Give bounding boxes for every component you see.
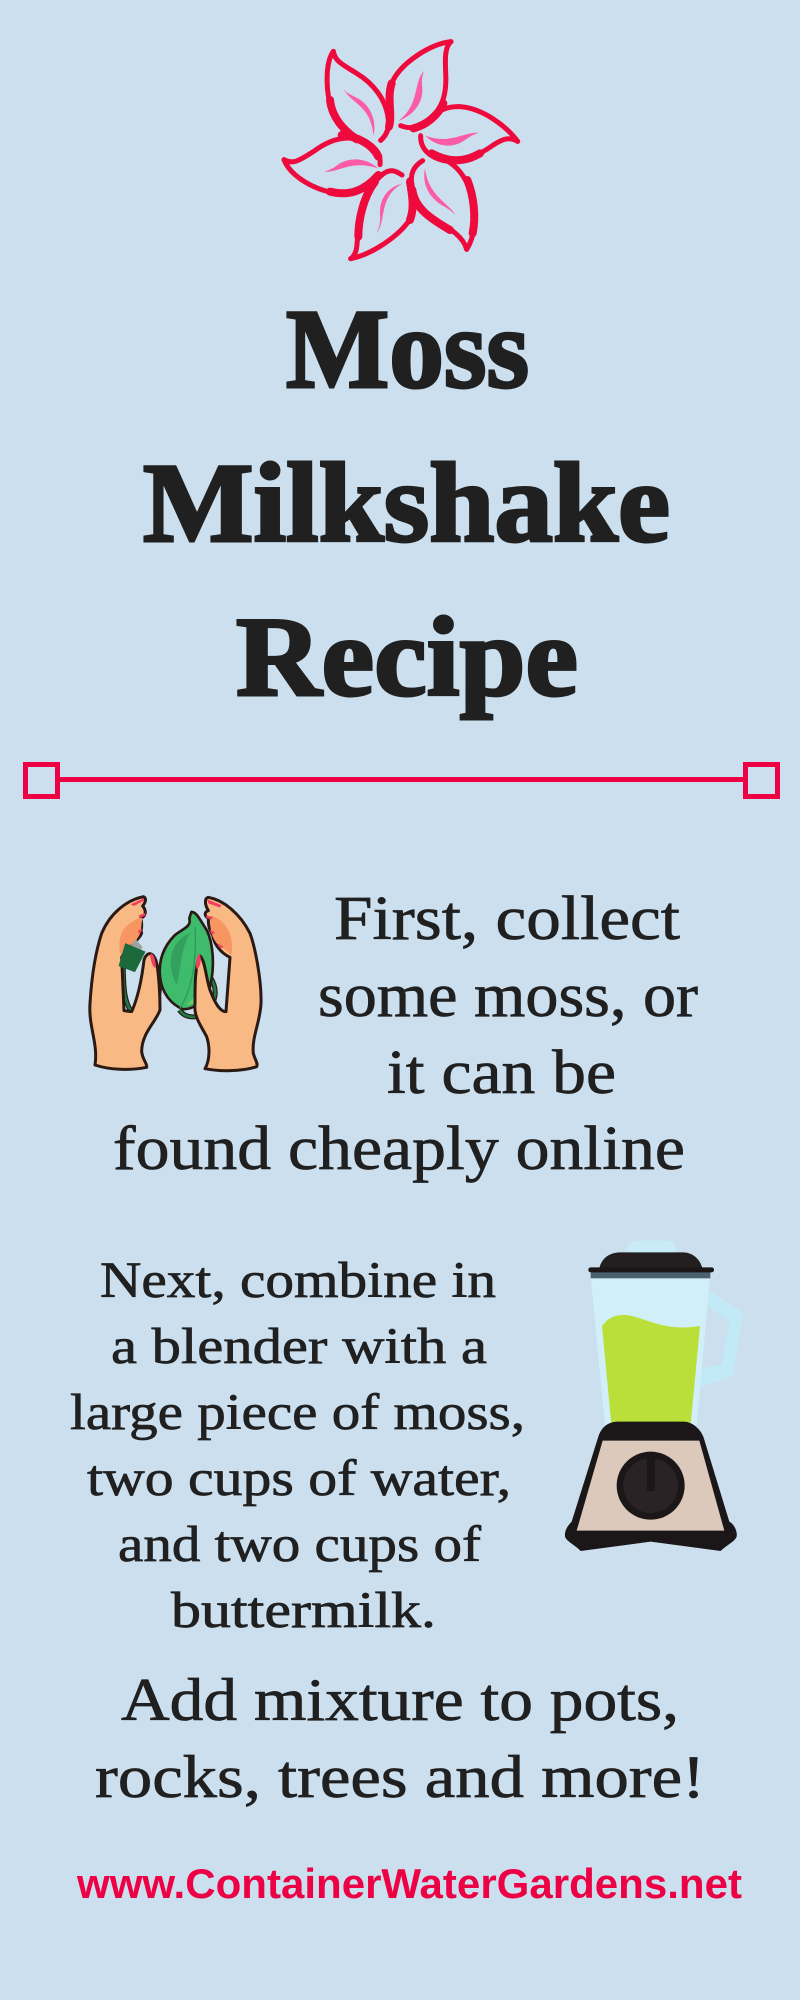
plug [119, 939, 145, 971]
website url: www.ContainerWaterGardens.net [76, 1860, 742, 1907]
text block: second step: two cups of water, [87, 1451, 511, 1507]
text block: second step: large piece of moss, [70, 1385, 525, 1441]
text block: first step: it can be [387, 1039, 616, 1107]
text block: first step: First, collect [334, 885, 680, 953]
icon: hands holding moss leaf [90, 897, 261, 1071]
text block: first step [113, 885, 698, 1183]
text block: final step: rocks, trees and more! [95, 1744, 705, 1810]
blender base [565, 1422, 737, 1551]
palm shading and nails [119, 898, 232, 969]
lid knob [627, 1241, 676, 1261]
jar handle [698, 1290, 743, 1388]
text block: first step: found cheaply online [113, 1115, 685, 1183]
left hand [90, 897, 160, 1069]
vine [123, 967, 215, 1020]
glass jar [591, 1277, 710, 1425]
green milkshake [602, 1315, 700, 1424]
text block: second step: Next, combine in [100, 1253, 496, 1309]
right hand [195, 897, 261, 1071]
text block: second step: and two cups of [118, 1517, 481, 1573]
jar lid [588, 1252, 714, 1278]
text block: first step: some moss, or [318, 962, 698, 1030]
divider with square ends [26, 764, 778, 796]
title: Moss [286, 287, 529, 412]
moss leaf [160, 912, 213, 1009]
text block: final step: Add mixture to pots, [121, 1667, 679, 1733]
title: Recipe [236, 595, 578, 720]
title [143, 287, 670, 720]
text block: second step [70, 1253, 525, 1639]
title: Milkshake [143, 441, 670, 566]
text block: final step [95, 1667, 705, 1810]
icon: flower logo [284, 42, 518, 259]
icon: blender [565, 1241, 743, 1551]
text block: second step: buttermilk. [171, 1583, 436, 1639]
text block: second step: a blender with a [111, 1319, 487, 1375]
